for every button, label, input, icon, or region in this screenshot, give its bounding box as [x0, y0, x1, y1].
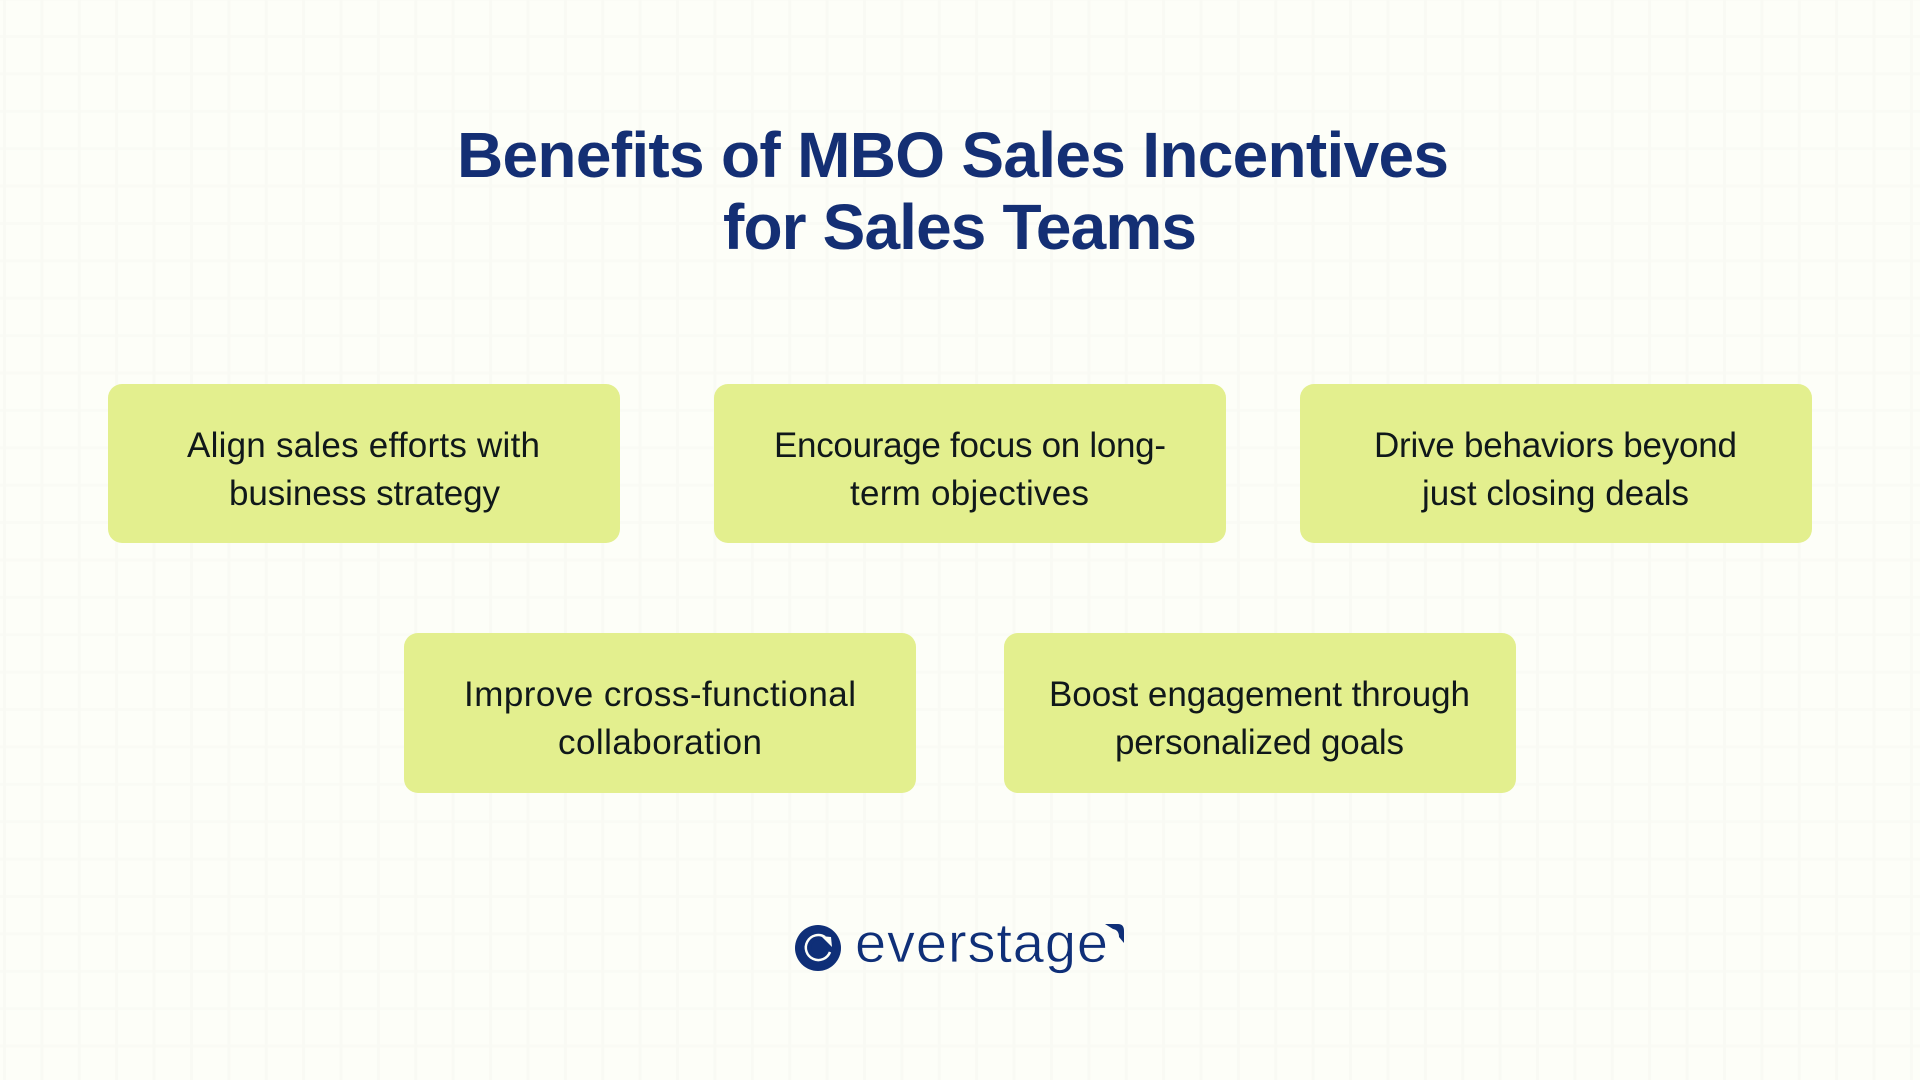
logo wordmark: everstage — [855, 911, 1108, 974]
panel: align sales efforts: business strategy — [229, 474, 500, 513]
panel: cross-functional collaboration: collaboration — [558, 723, 762, 762]
panel: cross-functional collaboration: Improve cross-functional — [464, 675, 856, 714]
panel: cross-functional collaboration — [404, 633, 916, 793]
title — [457, 119, 1449, 263]
panel: personalized goals: Boost engagement through — [1049, 675, 1470, 714]
panel: drive behaviors: just closing deals — [1421, 474, 1689, 513]
panel: drive behaviors: Drive behaviors beyond — [1374, 426, 1737, 465]
panel: personalized goals: personalized goals — [1115, 723, 1404, 762]
icon: logo mark — [795, 925, 841, 971]
panel: personalized goals — [1004, 633, 1516, 793]
panel: long-term objectives — [714, 384, 1226, 543]
panel: long-term objectives: Encourage focus on long- — [774, 426, 1166, 465]
panel: align sales efforts — [108, 384, 620, 543]
panel: align sales efforts: Align sales efforts with — [187, 426, 540, 465]
title: Benefits of MBO Sales Incentives — [457, 119, 1449, 191]
icon: corner mark — [1105, 924, 1124, 943]
title: for Sales Teams — [723, 191, 1197, 263]
panel: long-term objectives: term objectives — [850, 474, 1089, 513]
logo: everstage — [795, 911, 1124, 974]
panel: drive behaviors — [1300, 384, 1812, 543]
